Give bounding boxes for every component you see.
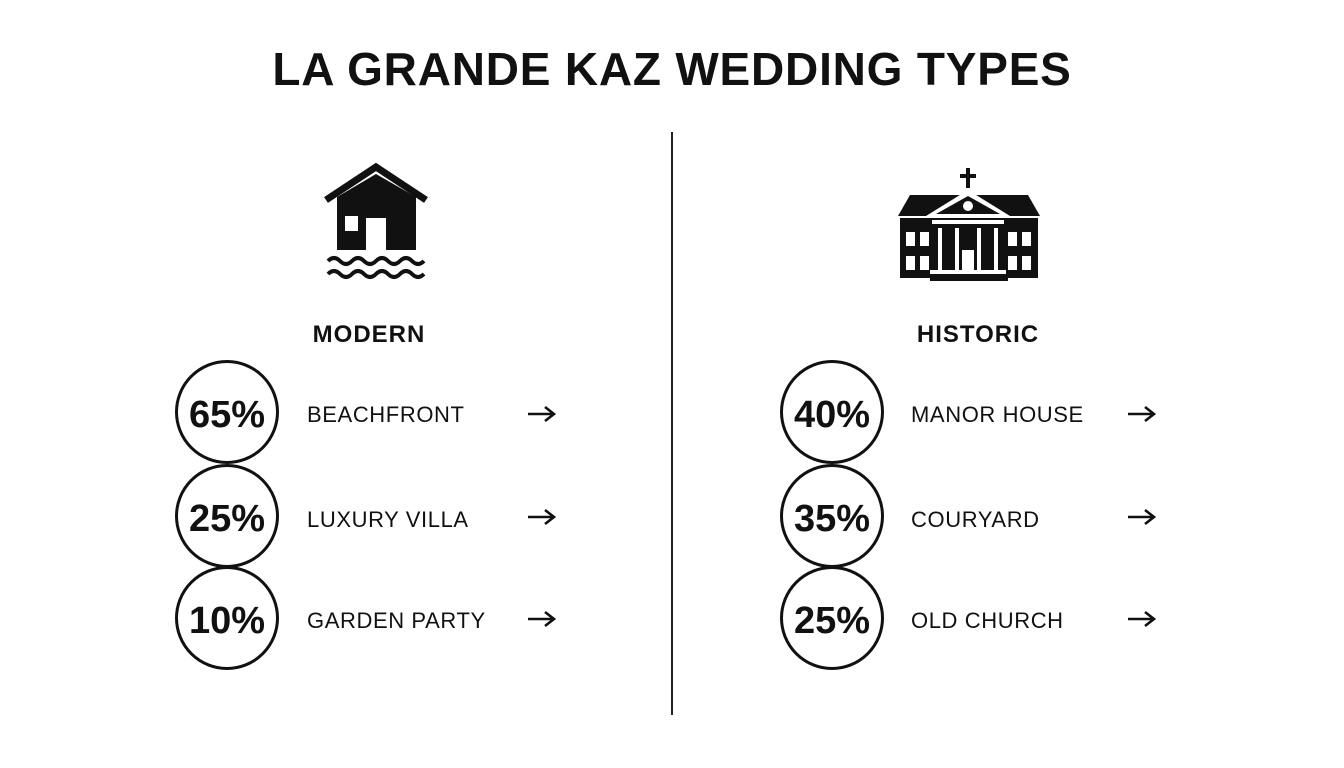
- item: garden party: [175, 567, 556, 670]
- icon: beach house: [324, 162, 428, 280]
- item: old church: OLD CHURCH: [911, 608, 1064, 633]
- item: manor house: MANOR HOUSE: [911, 402, 1084, 427]
- heading: historic: HISTORIC: [917, 321, 1039, 348]
- item: manor house: [780, 360, 1156, 464]
- item: beachfront: 65%: [189, 394, 265, 436]
- item: garden party: 10%: [189, 600, 265, 642]
- item: beachfront: BEACHFRONT: [307, 402, 465, 427]
- heading: modern: MODERN: [313, 321, 425, 348]
- item: manor house: 40%: [794, 394, 870, 436]
- item: couryard: COURYARD: [911, 507, 1040, 532]
- item: luxury villa: LUXURY VILLA: [307, 507, 469, 532]
- item: beachfront: [175, 360, 556, 464]
- item: luxury villa: [175, 464, 556, 567]
- item: couryard: 35%: [794, 498, 870, 540]
- item: garden party: GARDEN PARTY: [307, 608, 486, 633]
- title: LA GRANDE KAZ WEDDING TYPES: [272, 43, 1072, 95]
- icon: historic building: [898, 168, 1040, 281]
- item: old church: 25%: [794, 600, 870, 642]
- panel: modern list: [175, 360, 556, 670]
- divider: [671, 132, 673, 715]
- item: couryard: [780, 464, 1156, 567]
- item: old church: [780, 567, 1156, 670]
- panel: historic list: [780, 360, 1156, 670]
- item: luxury villa: 25%: [189, 498, 265, 540]
